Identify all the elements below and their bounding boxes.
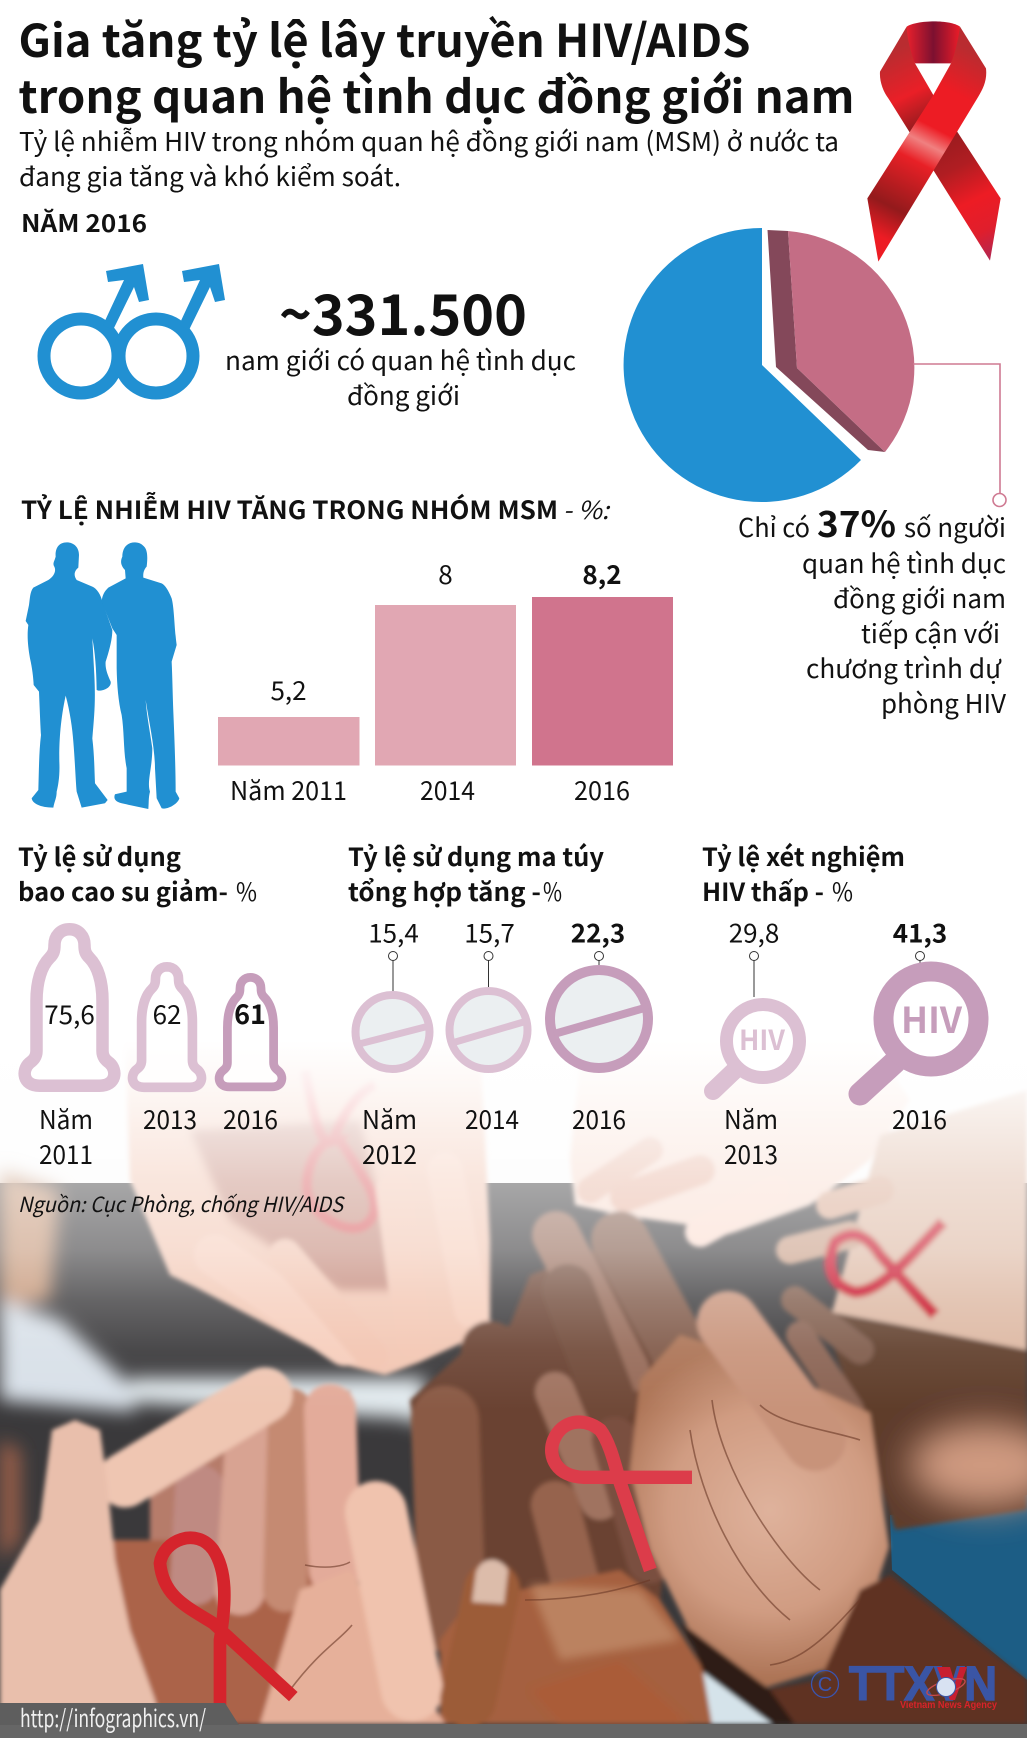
title	[18, 5, 854, 126]
heading: synthetic drugs rising	[348, 838, 605, 909]
heading: condom use falling: Tỷ lệ sử dụng	[18, 838, 181, 874]
callout: 37% text: đồng giới nam	[833, 579, 1006, 616]
right upper hand	[830, 1090, 1027, 1350]
panel: HIV testing: 41,3	[893, 914, 947, 950]
bar chart: HIV prevalence: 2014	[420, 771, 475, 808]
callout: 37% text: số người	[904, 508, 1006, 545]
bar chart: HIV prevalence	[218, 555, 673, 808]
callout: 37% text: 37%	[817, 496, 896, 548]
logo: TTXVN: C	[818, 1674, 832, 1696]
title: trong quan hệ tình dục đồng giới nam	[18, 61, 854, 126]
panel: condom use: 2011	[39, 1135, 93, 1172]
icon: condom 2013	[132, 967, 202, 1087]
panel: synthetic drug use: 2016	[572, 1100, 626, 1137]
footer bar	[0, 1699, 1027, 1738]
source note: Nguồn: Cục Phòng, chống HIV/AIDS	[18, 1189, 345, 1219]
upper left hand	[125, 1040, 490, 1375]
heading: condom use falling	[18, 838, 257, 909]
panel: condom use: 61	[234, 993, 266, 1032]
heading: HIV testing low: HIV thấp -	[702, 873, 824, 909]
subtitle: đang gia tăng và khó kiểm soát.	[19, 157, 401, 194]
icon: magnifier 2016	[860, 952, 978, 1094]
heading: HIV testing low: Tỷ lệ xét nghiệm	[702, 838, 905, 874]
icon: magnifier 2016: HIV	[901, 992, 963, 1044]
icon: magnifier 2013	[713, 952, 800, 1091]
panel: synthetic drug use	[348, 838, 648, 1172]
big palm	[630, 1335, 889, 1687]
statistic: 331,500 men	[225, 271, 576, 413]
pie chart: 37%	[624, 228, 914, 502]
heading: HIV testing low	[702, 838, 905, 909]
statistic: 331,500 men: ~331.500	[279, 271, 527, 352]
subtitle: Tỷ lệ nhiễm HIV trong nhóm quan hệ đồng giới nam (MSM) ở nước ta	[19, 122, 839, 159]
panel: condom use: 2016	[223, 1100, 278, 1137]
ribbon in left palm	[160, 1538, 293, 1713]
panel: HIV testing: Năm	[724, 1100, 778, 1137]
callout: 37% text: phòng HIV	[881, 684, 1006, 721]
central fingers	[410, 1240, 690, 1640]
panel: HIV testing	[702, 838, 978, 1172]
callout: 37% text: tiếp cận với	[861, 614, 1000, 651]
icon: two men silhouette	[26, 542, 179, 809]
icon: red AIDS ribbon	[867, 21, 1001, 262]
panel: HIV testing: 2016	[892, 1100, 947, 1137]
subtitle	[19, 122, 839, 194]
bar chart: HIV prevalence: 2016	[574, 771, 630, 808]
creases	[290, 1400, 860, 1690]
panel: condom use: 62	[153, 995, 181, 1032]
panel: synthetic drug use: 2014	[465, 1100, 519, 1137]
icon: pill 2014	[450, 952, 528, 1069]
panel: synthetic drug use: 15,4	[368, 914, 419, 950]
logo: TTXVN: Vietnam News Agency	[900, 1699, 997, 1711]
icon: condom 2016	[219, 977, 282, 1087]
lower central hand	[440, 1570, 722, 1724]
panel: condom use: Năm	[39, 1100, 93, 1137]
heading: HIV rate among MSM: - %:	[563, 491, 611, 527]
lower left hand	[150, 1390, 360, 1570]
heading: synthetic drugs rising: Tỷ lệ sử dụng ma túy	[348, 838, 605, 874]
title: Gia tăng tỷ lệ lây truyền HIV/AIDS	[18, 5, 750, 70]
icon: pill 2016	[550, 952, 648, 1068]
panel: synthetic drug use: 15,7	[464, 914, 515, 950]
statistic: 331,500 men: nam giới có quan hệ tình dục	[225, 341, 576, 378]
panel: synthetic drug use: 2012	[362, 1135, 417, 1172]
icon: condom 2011	[25, 929, 114, 1086]
icon: pill 2012	[356, 952, 430, 1069]
heading: condom use falling: bao cao su giảm-	[18, 873, 228, 909]
heading: HIV rate among MSM: TỶ LỆ NHIỄM HIV TĂNG TRONG NHÓM MSM	[21, 490, 558, 527]
heading: synthetic drugs rising: %	[543, 873, 562, 909]
ribbon in right palm	[552, 1422, 692, 1570]
statistic: 331,500 men: đồng giới	[347, 376, 460, 413]
panel: condom use: 2013	[143, 1100, 197, 1137]
heading: condom use falling: %	[236, 873, 257, 909]
callout: 37% text	[738, 496, 1006, 721]
callout: 37% text: Chỉ có	[738, 508, 810, 545]
heading: synthetic drugs rising: tổng hợp tăng -	[348, 873, 541, 909]
leader line from pie to callout	[913, 364, 1006, 506]
bar chart: HIV prevalence: 8	[438, 555, 453, 592]
panel: HIV testing: 29,8	[729, 914, 779, 950]
bar chart: HIV prevalence: 5,2	[270, 671, 307, 708]
footer bar: http://infographics.vn/	[20, 1699, 206, 1734]
icon: magnifier 2013: HIV	[739, 1019, 786, 1059]
panel: HIV testing: 2013	[724, 1135, 778, 1172]
bar chart: HIV prevalence: Năm 2011	[230, 771, 347, 808]
heading: HIV testing low: %	[832, 873, 853, 909]
label: year 2016: NĂM 2016	[21, 204, 147, 239]
logo: TTXVN: TTXVN	[849, 1658, 997, 1711]
panel: condom use: 75,6	[44, 995, 95, 1032]
callout: 37% text: chương trình dự	[806, 649, 1002, 686]
panel: synthetic drug use: Năm	[362, 1100, 417, 1137]
panel: condom use	[18, 838, 282, 1172]
upper right hand	[570, 1040, 910, 1245]
icon: double male symbols	[44, 264, 225, 393]
background photo: hands holding red ribbons	[0, 1000, 1027, 1728]
callout: 37% text: quan hệ tình dục	[802, 544, 1006, 581]
panel: synthetic drug use: 22,3	[571, 914, 625, 950]
bar chart: HIV prevalence: 8,2	[582, 555, 622, 592]
